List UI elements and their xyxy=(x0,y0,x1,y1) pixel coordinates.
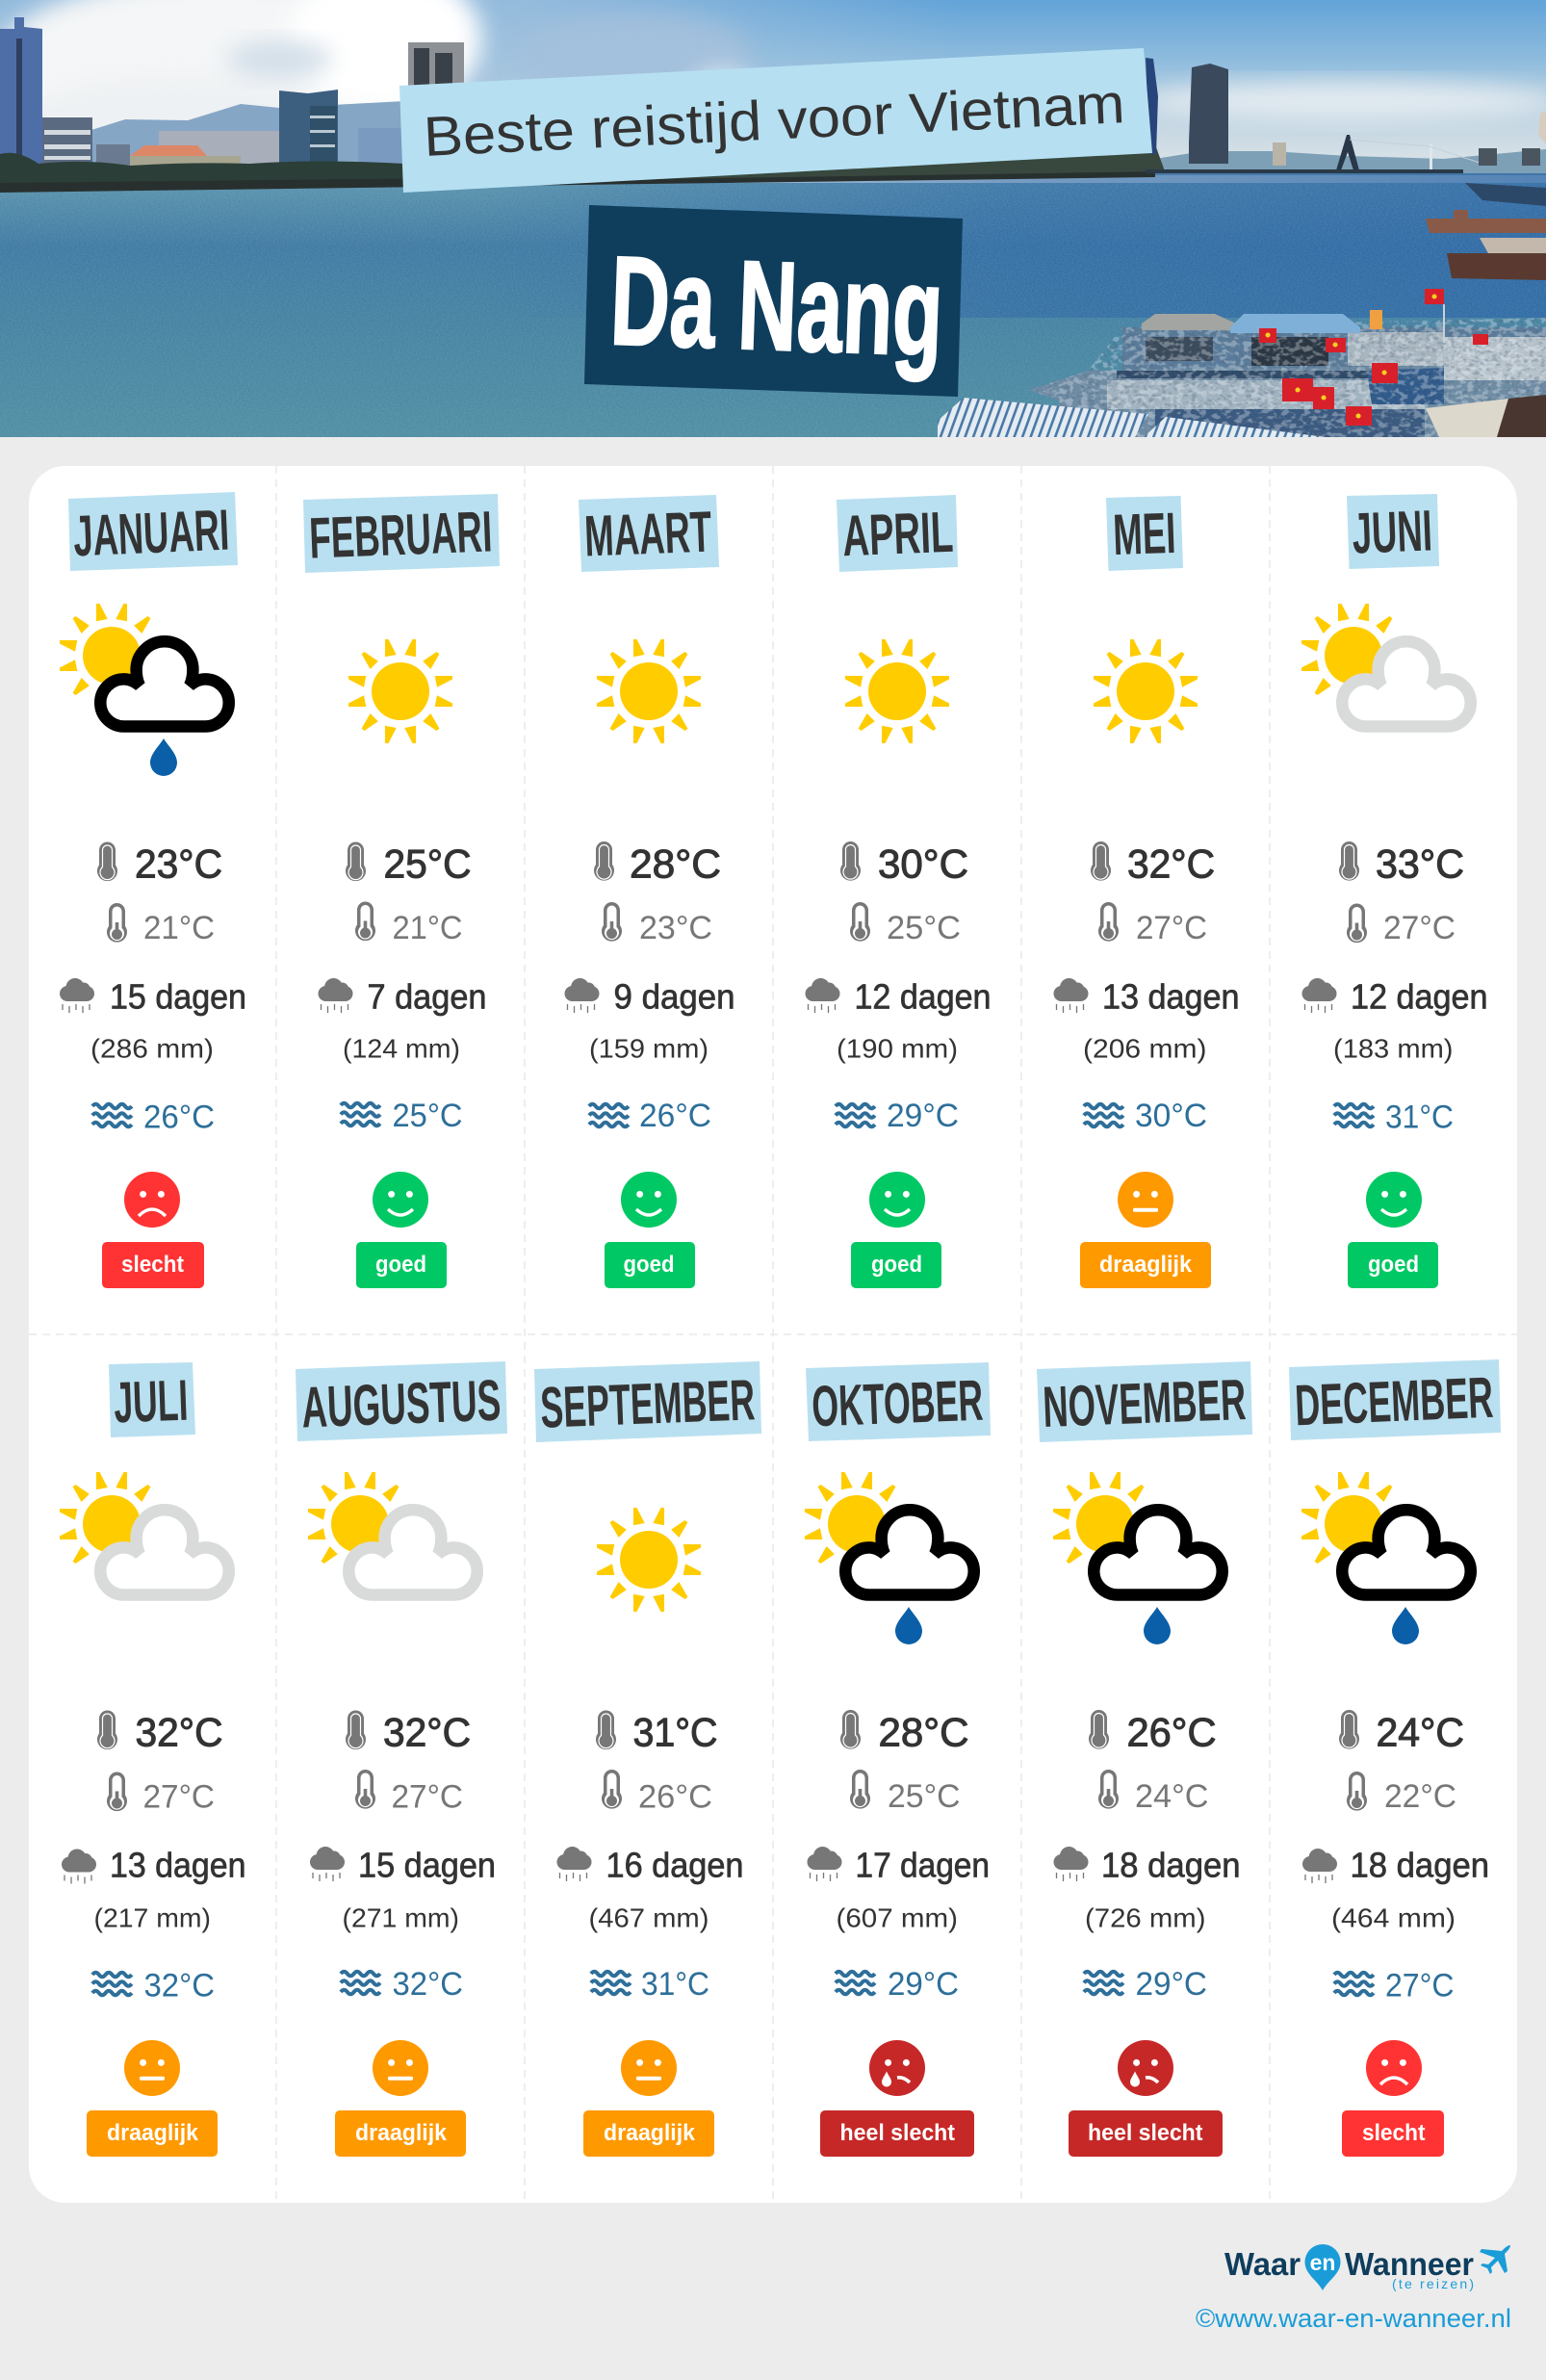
icon: rain cloud xyxy=(318,978,352,1013)
panel: juni xyxy=(1301,494,1488,1288)
icon: happy face xyxy=(869,1172,925,1228)
month label: JANUARI xyxy=(72,498,230,568)
rating: heel slecht: heel slecht xyxy=(1088,2120,1203,2146)
icon: crying face xyxy=(1118,2040,1173,2096)
icon: map pin: en xyxy=(1310,2250,1335,2275)
icon: sun xyxy=(597,639,701,743)
sea temperature: 31°C xyxy=(641,1966,709,2003)
sea temperature: 32°C xyxy=(144,1968,215,2005)
icon: rain cloud xyxy=(556,1847,591,1881)
icon: waves xyxy=(1084,1104,1123,1126)
max temperature: 26°C xyxy=(1126,1710,1217,1754)
rating: goed xyxy=(1348,1242,1438,1288)
icon: sad face xyxy=(124,1172,180,1228)
rating: heel slecht xyxy=(820,2110,974,2157)
sea temperature: 27°C xyxy=(1385,1968,1454,2005)
icon: neutral face xyxy=(621,2040,677,2096)
min temperature: 23°C xyxy=(639,910,712,946)
month label xyxy=(109,1362,195,1437)
icon: happy face xyxy=(621,1172,677,1228)
rating: slecht xyxy=(102,1242,204,1288)
rating: goed xyxy=(605,1242,695,1288)
icon: waves xyxy=(1334,1973,1374,1995)
month label xyxy=(806,1362,991,1441)
panel: mei xyxy=(1053,496,1240,1288)
icon: rain cloud xyxy=(310,1847,345,1881)
panel: oktober xyxy=(805,1362,991,2157)
icon: waves xyxy=(836,1972,875,1994)
month label: NOVEMBER xyxy=(1042,1367,1247,1439)
icon: rain cloud xyxy=(60,978,94,1013)
sea temperature: 29°C xyxy=(887,1098,959,1134)
icon: thermometer high xyxy=(596,1710,616,1749)
rating: goed: goed xyxy=(1368,1252,1419,1278)
sea temperature: 25°C xyxy=(393,1098,462,1134)
rating: draaglijk: draaglijk xyxy=(1099,1252,1193,1278)
rating: heel slecht: heel slecht xyxy=(839,2120,955,2146)
city name block xyxy=(584,205,963,397)
rating: goed: goed xyxy=(375,1252,426,1278)
rainy days: 12 dagen xyxy=(1351,976,1488,1017)
city name block: Da Nang xyxy=(608,229,945,382)
month label xyxy=(68,492,238,571)
rainy days: 7 dagen xyxy=(368,976,487,1017)
icon: sun and grey cloud xyxy=(60,1472,229,1594)
rainfall: (217 mm) xyxy=(94,1902,211,1933)
icon: thermometer low xyxy=(850,902,870,942)
icon: sun, cloud and rain xyxy=(1301,1472,1471,1644)
icon: waves xyxy=(836,1104,875,1126)
icon: thermometer low xyxy=(850,1770,870,1809)
month label: OKTOBER xyxy=(811,1368,984,1438)
max temperature: 28°C xyxy=(878,1710,968,1754)
month label: SEPTEMBER xyxy=(539,1367,756,1440)
panel: september xyxy=(534,1361,761,2157)
icon: sun xyxy=(845,639,949,743)
rating: goed xyxy=(356,1242,447,1288)
icon: thermometer high xyxy=(346,841,366,881)
sea temperature: 29°C xyxy=(888,1966,959,2003)
title banner xyxy=(399,48,1152,193)
max temperature: 28°C xyxy=(630,841,721,886)
month label: JUNI xyxy=(1351,498,1433,566)
rating: heel slecht xyxy=(1069,2110,1223,2157)
month label: MEI xyxy=(1112,501,1176,567)
rainfall: (467 mm) xyxy=(589,1902,709,1933)
icon: thermometer high xyxy=(840,1710,861,1749)
icon: waves xyxy=(92,1973,132,1995)
month label xyxy=(1106,496,1183,571)
title banner: Beste reistijd voor Vietnam xyxy=(423,72,1126,168)
icon: rain cloud xyxy=(62,1849,96,1883)
rating: goed: goed xyxy=(624,1252,674,1278)
icon: waves xyxy=(341,1972,380,1994)
icon: rain cloud xyxy=(1301,978,1336,1013)
rating: draaglijk xyxy=(335,2110,466,2157)
month label xyxy=(303,494,500,573)
min temperature: 21°C xyxy=(393,910,462,946)
month label xyxy=(296,1361,507,1441)
icon: rain cloud xyxy=(1302,1849,1337,1883)
rainfall: (271 mm) xyxy=(343,1902,459,1933)
icon: thermometer low xyxy=(1347,1772,1367,1811)
icon: map pin xyxy=(1305,2244,1340,2290)
icon: thermometer low xyxy=(1098,902,1119,942)
icon: sun xyxy=(597,1508,701,1612)
month label: JULI xyxy=(113,1368,189,1435)
panel: december xyxy=(1289,1359,1501,2157)
icon: thermometer high xyxy=(1091,841,1111,881)
icon: sun and grey cloud xyxy=(308,1472,477,1594)
rainfall: (159 mm) xyxy=(589,1034,709,1063)
min temperature: 25°C xyxy=(888,1778,961,1815)
icon: thermometer low xyxy=(355,1770,375,1809)
rating: goed xyxy=(851,1242,941,1288)
logo: Waar en Wanneer xyxy=(1224,2244,1510,2291)
icon: thermometer high xyxy=(840,841,861,881)
rainfall: (190 mm) xyxy=(837,1034,958,1063)
rainy days: 15 dagen xyxy=(358,1845,496,1885)
icon: thermometer high xyxy=(1339,1710,1359,1749)
icon: sun, cloud and rain xyxy=(1053,1472,1223,1644)
icon: waves xyxy=(589,1104,629,1126)
icon: thermometer high xyxy=(594,841,614,881)
min temperature: 25°C xyxy=(887,910,961,946)
icon: happy face xyxy=(373,1172,428,1228)
rating: draaglijk xyxy=(87,2110,218,2157)
rainy days: 12 dagen xyxy=(855,976,992,1017)
month label xyxy=(1347,494,1439,569)
panel: augustus xyxy=(296,1361,507,2157)
icon: waves xyxy=(1084,1972,1123,1994)
panel: juli xyxy=(60,1362,246,2157)
logo: Waar en Wanneer: Wanneer xyxy=(1345,2246,1474,2282)
month label xyxy=(1037,1361,1252,1442)
rating: slecht: slecht xyxy=(1362,2120,1425,2146)
icon: sad face xyxy=(1366,2040,1422,2096)
rating: draaglijk: draaglijk xyxy=(107,2120,199,2146)
icon: neutral face xyxy=(124,2040,180,2096)
icon: rain cloud xyxy=(564,978,599,1013)
icon: thermometer low xyxy=(355,901,375,941)
rainfall: (286 mm) xyxy=(90,1034,214,1063)
logo: Waar en Wanneer: Waar xyxy=(1224,2246,1301,2282)
icon: crying face xyxy=(869,2040,925,2096)
icon: neutral face xyxy=(373,2040,428,2096)
icon: thermometer low xyxy=(107,903,127,943)
icon: airplane xyxy=(1480,2245,1510,2274)
sea temperature: 26°C xyxy=(143,1099,215,1136)
icon: thermometer low xyxy=(1098,1770,1119,1809)
rainy days: 13 dagen xyxy=(110,1845,246,1885)
rating: draaglijk xyxy=(583,2110,714,2157)
rainy days: 17 dagen xyxy=(855,1845,990,1885)
month label: AUGUSTUS xyxy=(300,1368,502,1439)
icon: rain cloud xyxy=(1053,978,1088,1013)
rating: goed: goed xyxy=(871,1252,922,1278)
min temperature: 27°C xyxy=(1136,910,1207,946)
month label xyxy=(837,495,958,572)
rainy days: 13 dagen xyxy=(1102,976,1240,1017)
icon: thermometer high xyxy=(1089,1710,1109,1749)
rainy days: 18 dagen xyxy=(1350,1845,1489,1885)
icon: neutral face xyxy=(1118,1172,1173,1228)
max temperature: 30°C xyxy=(878,841,968,886)
icon: thermometer high xyxy=(97,1710,117,1749)
panel: januari xyxy=(60,492,246,1288)
icon: sun, cloud and rain xyxy=(805,1472,974,1644)
rating: draaglijk xyxy=(1080,1242,1211,1288)
rainfall: (607 mm) xyxy=(836,1902,958,1933)
icon: thermometer high xyxy=(1339,841,1359,881)
rainfall: (124 mm) xyxy=(343,1034,460,1063)
website credit: ©www.waar-en-wanneer.nl xyxy=(1196,2304,1511,2333)
min temperature: 22°C xyxy=(1384,1778,1456,1815)
rainy days: 16 dagen xyxy=(606,1845,743,1885)
icon: sun xyxy=(1094,639,1198,743)
max temperature: 33°C xyxy=(1376,841,1464,886)
icon: rain cloud xyxy=(1053,1847,1088,1881)
rating: slecht xyxy=(1342,2110,1444,2157)
icon: sun and grey cloud xyxy=(1301,604,1471,726)
sea temperature: 30°C xyxy=(1135,1098,1207,1134)
panel: april xyxy=(805,495,992,1288)
min temperature: 24°C xyxy=(1135,1778,1209,1815)
month label: APRIL xyxy=(841,500,954,568)
icon: rain cloud xyxy=(807,1847,841,1881)
rainy days: 9 dagen xyxy=(614,976,735,1017)
icon: happy face xyxy=(1366,1172,1422,1228)
max temperature: 24°C xyxy=(1377,1710,1464,1754)
icon: waves xyxy=(1334,1104,1374,1126)
icon: rain cloud xyxy=(805,978,839,1013)
logo: Waar en Wanneer: (te reizen) xyxy=(1392,2276,1474,2291)
month label: FEBRUARI xyxy=(308,499,493,571)
min temperature: 27°C xyxy=(1383,910,1456,946)
icon: thermometer high xyxy=(346,1710,366,1749)
max temperature: 32°C xyxy=(135,1710,223,1754)
icon: waves xyxy=(341,1103,380,1125)
rainy days: 18 dagen xyxy=(1101,1845,1240,1885)
icon: thermometer low xyxy=(1347,903,1367,943)
max temperature: 31°C xyxy=(633,1710,718,1754)
rainfall: (206 mm) xyxy=(1083,1034,1207,1063)
min temperature: 27°C xyxy=(142,1779,215,1816)
icon: thermometer low xyxy=(602,1770,622,1809)
min temperature: 27°C xyxy=(391,1779,463,1816)
max temperature: 32°C xyxy=(1127,841,1215,886)
icon: sun, cloud and rain xyxy=(60,604,229,776)
month label xyxy=(534,1361,761,1442)
rating: slecht: slecht xyxy=(121,1252,184,1278)
sea temperature: 26°C xyxy=(639,1098,711,1134)
rainfall: (464 mm) xyxy=(1331,1902,1456,1933)
min temperature: 26°C xyxy=(638,1779,712,1816)
min temperature: 21°C xyxy=(143,910,215,946)
rainfall: (183 mm) xyxy=(1333,1034,1454,1063)
max temperature: 25°C xyxy=(383,841,472,886)
month label xyxy=(579,495,719,572)
max temperature: 32°C xyxy=(383,1710,471,1754)
max temperature: 23°C xyxy=(135,841,222,886)
icon: thermometer low xyxy=(602,902,622,942)
rainfall: (726 mm) xyxy=(1085,1902,1205,1933)
rating: draaglijk: draaglijk xyxy=(355,2120,448,2146)
icon: thermometer low xyxy=(107,1772,127,1811)
hero photo: Da Nang waterfront xyxy=(0,0,1546,437)
icon: waves xyxy=(92,1104,132,1126)
panel: februari xyxy=(303,494,500,1288)
sea temperature: 32°C xyxy=(393,1966,463,2003)
icon: sun xyxy=(348,639,452,743)
sea temperature: 29°C xyxy=(1136,1966,1207,2003)
rating: draaglijk: draaglijk xyxy=(604,2120,696,2146)
panel: november xyxy=(1037,1361,1252,2157)
sea temperature: 31°C xyxy=(1385,1099,1454,1136)
month label: MAART xyxy=(583,500,712,569)
panel: maart xyxy=(564,495,735,1288)
rainy days: 15 dagen xyxy=(110,976,246,1017)
icon: waves xyxy=(591,1972,631,1994)
icon: thermometer high xyxy=(97,841,117,881)
panel: monthly climate table xyxy=(29,466,1517,2203)
